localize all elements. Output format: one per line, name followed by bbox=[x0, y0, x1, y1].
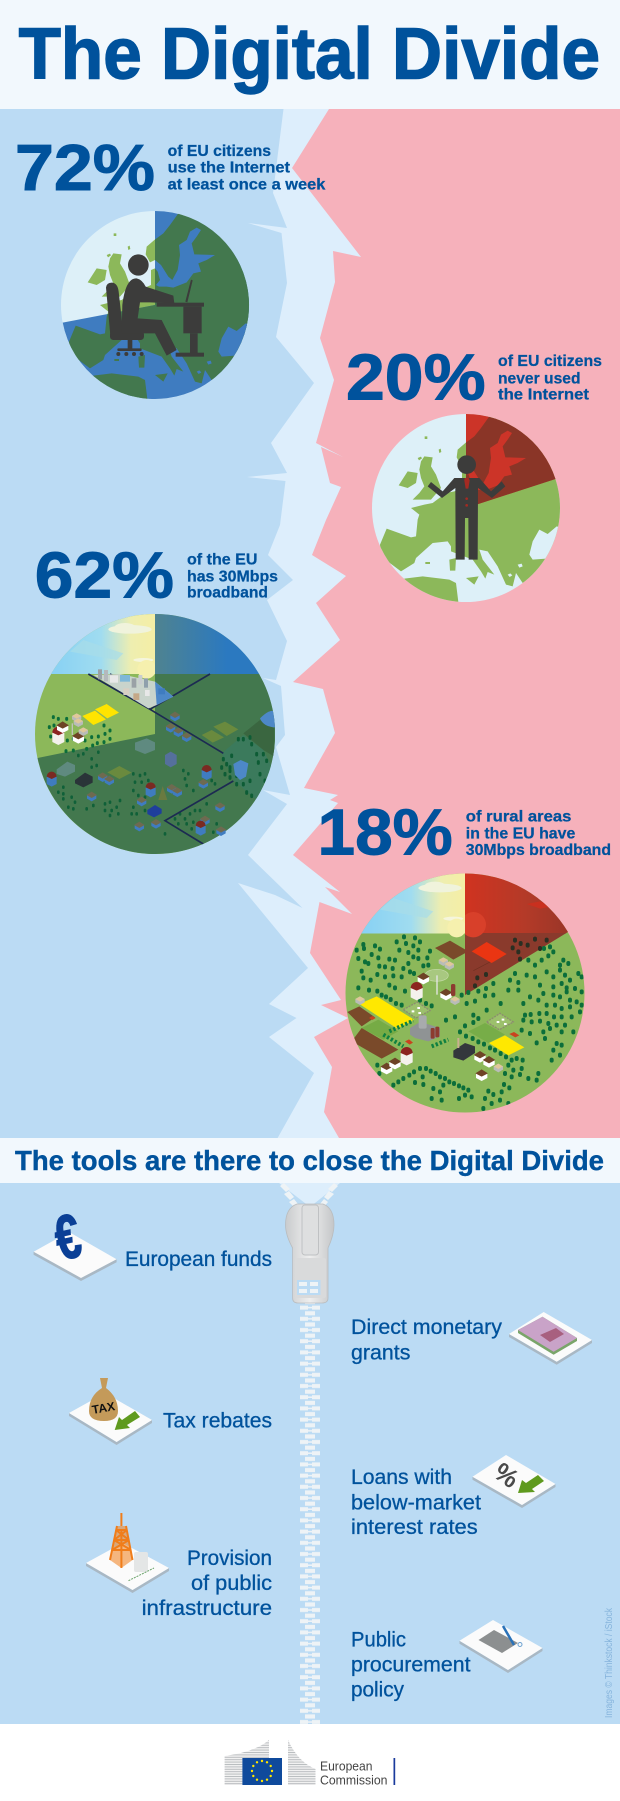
stat: 18%: 18% bbox=[318, 795, 453, 868]
stat: 62%: 62% bbox=[35, 539, 174, 612]
stat: 18%: 30Mbps broadband bbox=[466, 842, 611, 859]
tile with tower bbox=[86, 1513, 169, 1593]
city bbox=[93, 669, 173, 708]
stat: 72%: use the Internet bbox=[168, 159, 291, 176]
logo: European Commission: Commission bbox=[320, 1772, 388, 1787]
stat: 72%: 72% bbox=[15, 131, 155, 204]
tile with percent sign bbox=[472, 1455, 556, 1508]
tool: Direct monetary grants: Direct monetary bbox=[351, 1316, 503, 1339]
tool: Provision of public infrastructure: Provision bbox=[187, 1547, 272, 1570]
stat: 18% bbox=[318, 795, 611, 868]
heading: tools: The tools are there to close the Digital Divide bbox=[15, 1145, 604, 1176]
chart: 18% pie over rural landscape bbox=[345, 873, 585, 1113]
tool: Public procurement policy: Public bbox=[351, 1629, 406, 1652]
stat: 20%: 20% bbox=[346, 340, 486, 413]
stat: 62% bbox=[35, 539, 278, 612]
tool: Public procurement policy bbox=[351, 1620, 542, 1702]
tool: Public procurement policy: procurement bbox=[351, 1654, 471, 1677]
stat: 72%: of EU citizens bbox=[168, 143, 271, 160]
stat: 20%: the Internet bbox=[498, 386, 590, 403]
logo building bbox=[225, 1740, 316, 1785]
stat: 20%: never used bbox=[498, 370, 580, 387]
tile with tax bag bbox=[69, 1378, 152, 1445]
tile with tax bag: TAX bbox=[91, 1399, 116, 1417]
stat: 18%: in the EU have bbox=[466, 825, 575, 842]
tool: Loans bbox=[351, 1455, 556, 1539]
tool: Provision of public infrastructure: of public bbox=[191, 1572, 272, 1595]
band: tools heading bbox=[0, 1138, 620, 1183]
tile with percent sign: % bbox=[488, 1456, 525, 1494]
title: The Digital Divide bbox=[19, 14, 600, 94]
farm buildings bbox=[355, 957, 519, 1081]
tool: Loans: Loans with bbox=[351, 1466, 452, 1489]
panel: tools background bbox=[0, 1183, 620, 1724]
stat: 72% bbox=[15, 131, 326, 204]
chart: 20% pie over Europe map bbox=[372, 414, 560, 602]
tile with euro icon bbox=[34, 1200, 117, 1281]
image credit: Images © Thinkstock / iStock bbox=[604, 1607, 615, 1718]
stat: 62%: broadband bbox=[187, 585, 268, 602]
chart: 62% pie over landscape bbox=[35, 614, 275, 854]
header band bbox=[0, 0, 620, 109]
tool: European funds: European funds bbox=[125, 1248, 272, 1271]
tile with document bbox=[460, 1620, 542, 1673]
stat: 62%: has 30Mbps bbox=[187, 568, 278, 585]
tool: Loans: below-market bbox=[351, 1491, 481, 1514]
tool: Direct monetary grants bbox=[351, 1312, 592, 1365]
zipper slider bbox=[286, 1204, 334, 1303]
stat: 72%: at least once a week bbox=[168, 176, 326, 193]
stat: 18%: of rural areas bbox=[466, 809, 571, 826]
EU flag bbox=[242, 1758, 282, 1785]
tool: European funds bbox=[34, 1200, 272, 1281]
stat: 20%: of EU citizens bbox=[498, 353, 602, 370]
tool: Loans: interest rates bbox=[351, 1516, 478, 1539]
panel: divide background bbox=[0, 109, 620, 1138]
tool: Direct monetary grants: grants bbox=[351, 1341, 410, 1364]
logo: European Commission: European bbox=[320, 1759, 372, 1774]
map roads and trees bbox=[49, 674, 267, 844]
logo: European Commission bbox=[225, 1740, 395, 1787]
tool: Tax rebates bbox=[69, 1378, 272, 1445]
icon: person at desk bbox=[106, 254, 204, 357]
chart: 72% pie over Europe map bbox=[61, 211, 250, 399]
tile with banknotes bbox=[509, 1312, 592, 1365]
stat: 20% bbox=[346, 340, 602, 413]
tool: Provision of public infrastructure: infrastructure bbox=[142, 1597, 272, 1620]
stat: 62%: of the EU bbox=[187, 552, 257, 569]
tool: Tax rebates: Tax rebates bbox=[163, 1410, 272, 1433]
icon: standing person shrugging bbox=[428, 455, 505, 560]
trees bbox=[357, 936, 582, 1109]
tool: Public procurement policy: policy bbox=[351, 1679, 404, 1702]
tile with euro icon: € bbox=[48, 1200, 87, 1274]
zipper bbox=[279, 1183, 340, 1724]
houses and buildings bbox=[47, 712, 248, 836]
tool: Provision of public infrastructure bbox=[86, 1513, 272, 1620]
